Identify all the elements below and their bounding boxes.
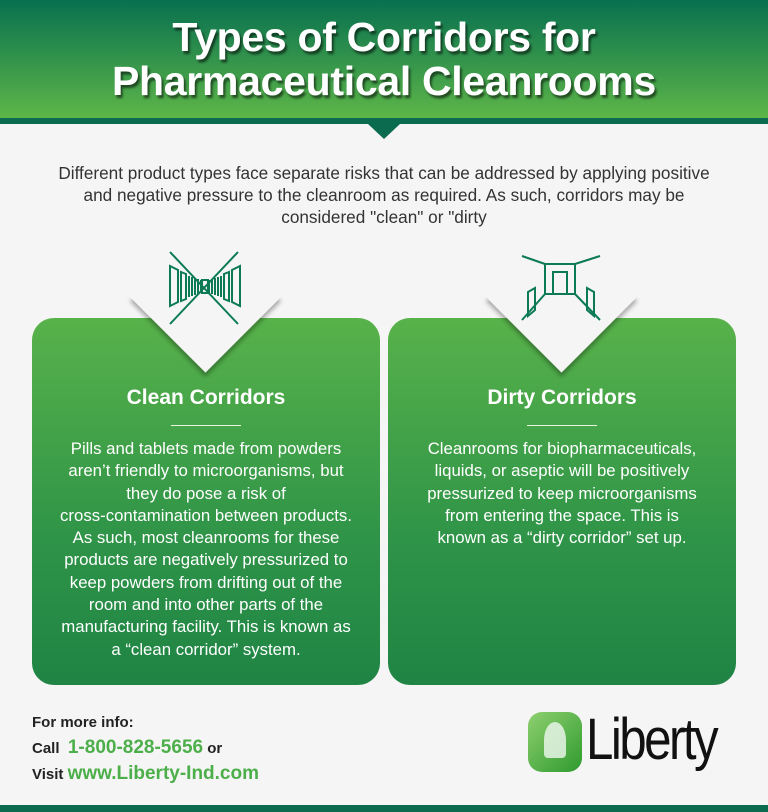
logo: Liberty	[586, 707, 716, 772]
text: clean: keep powders from drifting out of the	[70, 573, 342, 592]
text: clean: they do pose a risk of	[126, 484, 286, 503]
heading: dirty: Dirty Corridors	[487, 386, 637, 409]
text: clean: cross-contamination between products.	[60, 506, 352, 525]
footer contact	[32, 714, 259, 784]
heading: clean: Clean Corridors	[127, 386, 285, 409]
intro text: considered "clean" or "dirty	[281, 207, 487, 227]
text: clean: Pills and tablets made from powders	[71, 439, 341, 458]
text: clean: products are negatively pressurized to	[64, 550, 348, 569]
text: clean: a “clean corridor” system.	[111, 640, 301, 659]
header banner	[0, 0, 768, 118]
notch: dirty	[484, 218, 639, 373]
title	[112, 14, 658, 104]
panel: dirty corridors	[388, 318, 736, 685]
icon: dirty corridor	[521, 255, 601, 321]
title: Pharmaceutical Cleanrooms	[112, 58, 656, 104]
intro text: Different product types face separate risks that can be addressed by applying positive	[58, 163, 710, 183]
footer contact: Call 1-800-828-5656 or	[32, 737, 222, 758]
text: clean	[60, 439, 352, 659]
text: dirty: known as a “dirty corridor” set up.	[437, 528, 686, 547]
title: Types of Corridors for	[172, 14, 596, 60]
text: clean: aren’t friendly to microorganisms, but	[68, 461, 344, 480]
text: clean: manufacturing facility. This is known as	[61, 617, 351, 636]
text: dirty: from entering the space. This is	[445, 506, 679, 525]
text: clean: room and into other parts of the	[89, 595, 323, 614]
text: clean: As such, most cleanrooms for these	[73, 528, 339, 547]
footer contact: Visit www.Liberty-Ind.com	[32, 763, 259, 784]
text: dirty: Cleanrooms for biopharmaceuticals,	[428, 439, 696, 458]
intro text	[58, 163, 710, 227]
logo	[528, 707, 718, 772]
text: dirty: liquids, or aseptic will be positively	[435, 461, 689, 480]
notch: clean	[128, 218, 283, 373]
footer contact: For more info:	[32, 714, 134, 731]
text: dirty	[427, 439, 697, 547]
text: dirty: pressurized to keep microorganisms	[427, 484, 697, 503]
header pointer	[368, 124, 400, 139]
intro text: and negative pressure to the cleanroom as required. As such, corridors may be	[84, 185, 684, 205]
icon: clean corridor	[169, 251, 241, 325]
panel: clean corridors	[32, 318, 380, 685]
